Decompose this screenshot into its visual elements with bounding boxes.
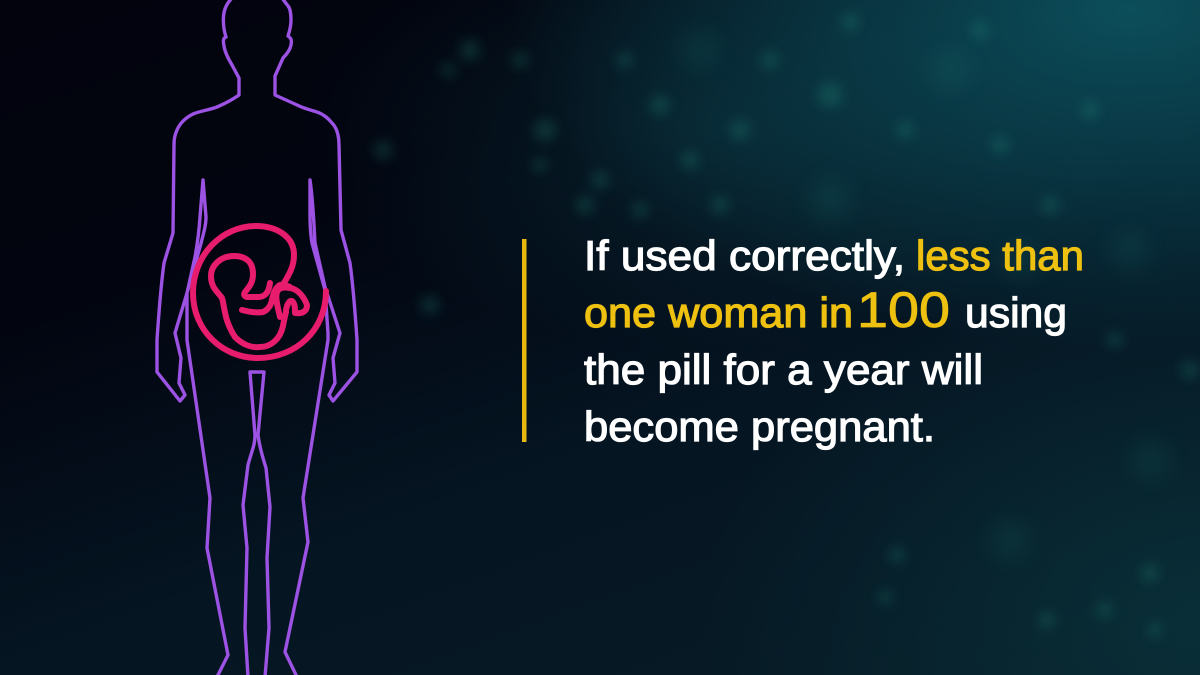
background bokeh particles bbox=[374, 13, 1199, 637]
fetus in womb icon bbox=[193, 226, 326, 358]
statement text: become pregnant. bbox=[584, 403, 935, 450]
statement text: one woman in bbox=[584, 289, 853, 336]
statement text bbox=[584, 232, 1084, 450]
statement text: less than bbox=[916, 232, 1084, 279]
womb ring bbox=[193, 226, 326, 358]
statement text: the pill for a year will bbox=[584, 346, 983, 393]
statement text: If used correctly, bbox=[584, 232, 905, 279]
statement text: 100 bbox=[857, 282, 950, 338]
fetus body bbox=[211, 256, 286, 347]
outer silhouette bbox=[157, 0, 239, 675]
statement text: using bbox=[965, 289, 1067, 336]
body outline figure bbox=[157, 0, 357, 675]
fetus leg bbox=[276, 287, 307, 317]
accent vertical bar bbox=[522, 239, 526, 442]
fetus arm bbox=[242, 285, 290, 312]
